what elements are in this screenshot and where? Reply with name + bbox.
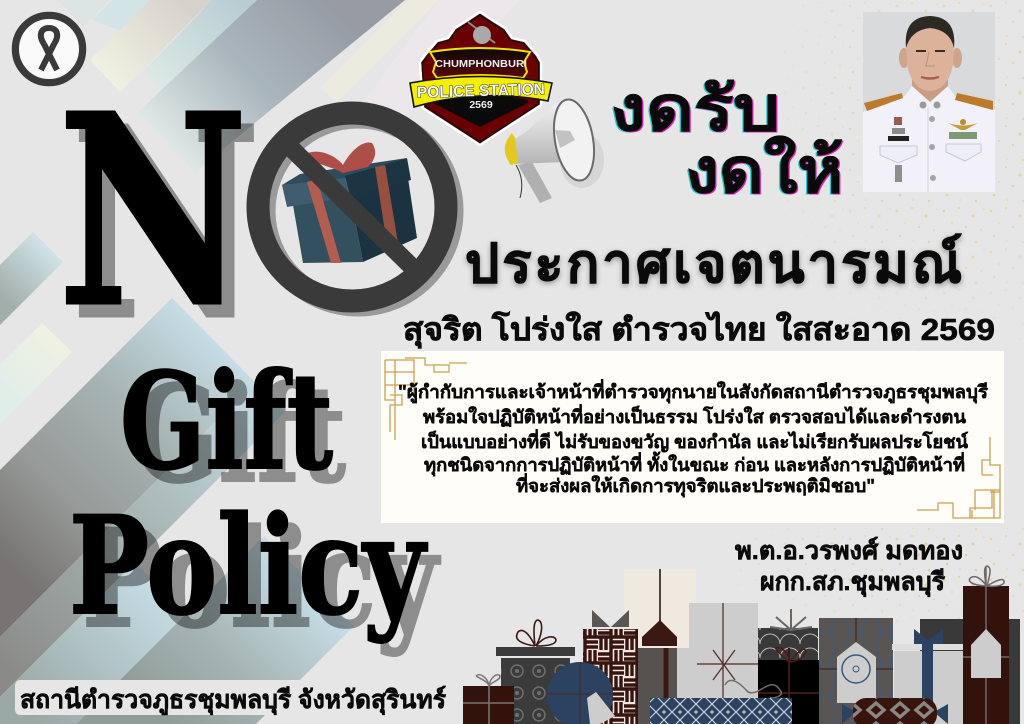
scale pattern gift	[758, 628, 818, 660]
heading: Gift: Gift	[133, 357, 346, 513]
head	[906, 20, 954, 91]
logo: Chumphonburi police station shield	[410, 12, 552, 145]
statement text	[398, 379, 988, 498]
footer label background and station name: สถานีตำรวจภูธรชุมพลบุรี จังหวัดสุรินทร์	[20, 685, 447, 716]
portrait of commander	[863, 12, 995, 192]
logo top text: CHUMPHONBURI	[435, 58, 527, 70]
portrait background	[863, 12, 995, 192]
hair	[906, 16, 954, 48]
prohibition ring	[258, 113, 446, 301]
light box with blue ribbon	[894, 651, 965, 724]
light gray gift	[689, 603, 758, 724]
round blue gift	[547, 662, 613, 724]
heading: N with shadow: N	[71, 70, 261, 378]
illustration: stack of gift boxes	[463, 566, 1020, 724]
buttons and placket	[927, 108, 929, 192]
statement text: พร้อมใจปฏิบัติหน้าที่อย่างเป็นธรรม โปร่งใส ตรวจสอบได้และดำรงตน	[423, 404, 967, 427]
pilot wings and ribbons	[948, 123, 978, 130]
dark gray back box	[920, 619, 1020, 724]
inner black panel	[430, 48, 530, 78]
icon: mourning ribbon badge	[15, 15, 83, 83]
gold speckle texture top right	[778, 2, 1024, 351]
cable	[516, 165, 522, 198]
heading: Gift: Gift	[120, 344, 333, 500]
logo banner text: POLICE STATION	[417, 81, 545, 102]
gift tag	[837, 642, 876, 703]
brown small gift	[463, 686, 514, 724]
patterned hexagon gift	[501, 658, 570, 724]
panel: declaration statement	[381, 351, 1004, 523]
heading: N with shadow: N	[58, 57, 248, 365]
gold speckle texture bottom	[730, 527, 1024, 633]
statement text: ที่จะส่งผลให้เกิดการทุจริตและประพฤติมิชอบ"	[516, 473, 875, 498]
yellow back cap	[505, 133, 518, 165]
shoulder boards	[864, 93, 903, 111]
black gift	[758, 660, 828, 724]
panel background	[381, 351, 1004, 523]
blue diamond gift	[650, 698, 792, 724]
medal	[895, 165, 902, 182]
ears	[899, 48, 909, 68]
statement text: "ผู้กำกับการและเจ้าหน้าที่ตำรวจทุกนายในสังกัดสถานีตำรวจภูธรชุมพลบุรี	[398, 379, 988, 404]
heading: Policy: Policy	[69, 486, 428, 645]
signature: commander name: พ.ต.อ.วรพงศ์ มดทอง	[735, 536, 963, 565]
candy gift	[842, 698, 948, 724]
signature: commander position: ผกก.สภ.ชุมพลบุรี	[760, 568, 946, 598]
cream box	[624, 569, 696, 659]
wave pattern gift	[819, 618, 893, 724]
uniform pockets	[880, 144, 981, 163]
no-gift prohibition icon	[258, 113, 452, 305]
icon: megaphone	[505, 96, 604, 203]
gold corner ornament bottom right	[917, 437, 1000, 518]
lower black chevron	[433, 95, 528, 127]
heading: declaration of intent: ประกาศเจตนารมณ์	[465, 233, 962, 294]
left badges	[894, 117, 902, 125]
horn mouth	[548, 96, 600, 184]
prohibition slash	[290, 147, 412, 267]
gift box	[282, 143, 417, 263]
gray box	[638, 648, 697, 724]
brick gift	[583, 629, 638, 724]
icon shadow ring	[264, 117, 452, 305]
tall brown gift	[963, 586, 1009, 724]
heading: no giving: งดให้	[686, 136, 844, 207]
speaker centre	[555, 130, 575, 148]
shield dark border	[422, 15, 539, 142]
white uniform	[863, 86, 995, 192]
horn body	[510, 102, 566, 164]
shield body	[420, 12, 541, 145]
logo year: 2569	[469, 99, 493, 111]
heading: no giving: งดให้	[684, 136, 842, 207]
megaphone shadow	[560, 132, 604, 188]
emblem	[468, 22, 495, 44]
diagonal background bands	[0, 0, 520, 724]
heading: no accepting: งดรับ	[612, 76, 782, 145]
yellow banner	[410, 76, 552, 107]
neck	[912, 75, 948, 108]
subheading: honest transparent police: สุจริต โปร่งใส ตำรวจไทย ใสสะอาด 2569	[403, 311, 995, 349]
statement text: เป็นแบบอย่างที่ดี ไม่รับของขวัญ ของกำนัล และไม่เรียกรับผลประโยชน์	[421, 429, 969, 453]
heading: no accepting: งดรับ	[608, 76, 778, 145]
handle	[518, 162, 552, 203]
ribbon curl	[725, 680, 781, 698]
statement text: ทุกชนิดจากการปฏิบัติหน้าที่ ทั้งในขณะ ก่อน และหลังการปฏิบัติหน้าที่	[424, 451, 965, 477]
face features	[916, 50, 945, 52]
heading: no accepting: งดรับ	[610, 75, 780, 144]
collar pins	[920, 102, 926, 108]
gold corner ornament top left	[385, 358, 467, 440]
heading: no giving: งดให้	[685, 135, 843, 206]
heading: Policy: Policy	[82, 499, 441, 658]
